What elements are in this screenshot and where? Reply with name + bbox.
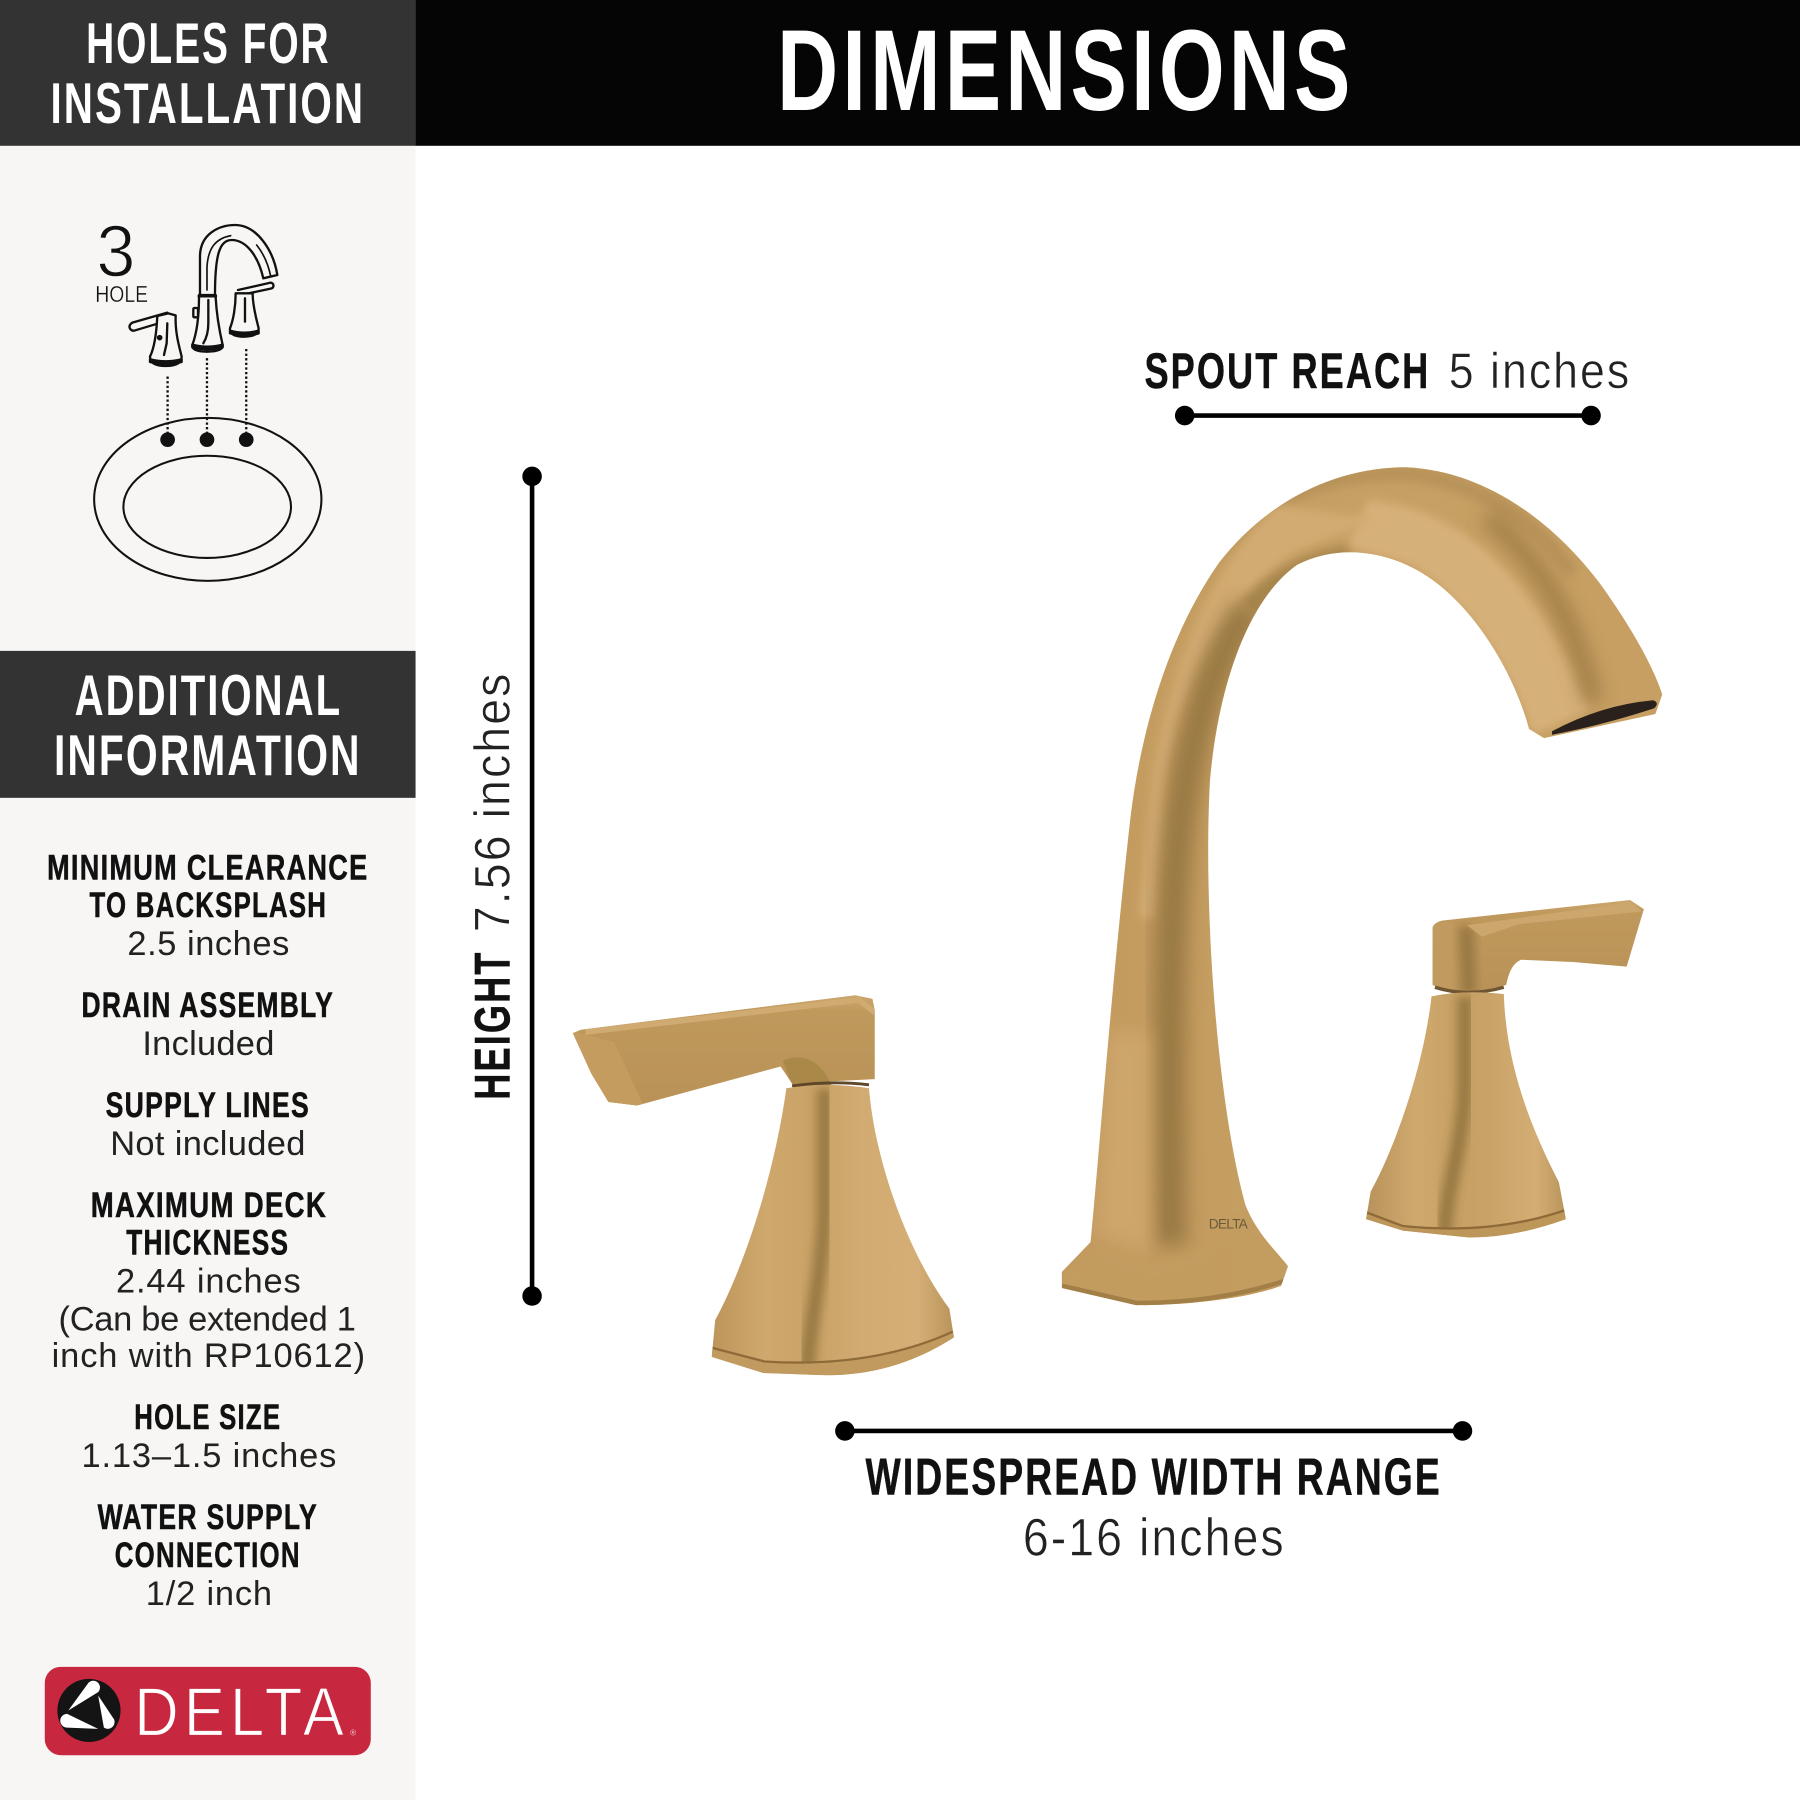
header: holes for installation: HOLES FOR: [86, 12, 331, 76]
icon: 3 hole faucet and sink: 3: [96, 210, 135, 293]
faucet: spout: DELTA: [1209, 1216, 1249, 1231]
height label: 7.56 inches: [464, 672, 521, 932]
spout reach dimension line: [1175, 406, 1601, 425]
header: holes for installation: INSTALLATION: [51, 72, 365, 136]
height dimension line: [522, 467, 542, 1306]
spec: maximum deck thickness: (Can be extended 1: [59, 1300, 356, 1338]
spec: minimum clearance: [47, 847, 368, 963]
spout reach label: 5 inches: [1449, 342, 1631, 399]
spec: drain assembly: [82, 985, 334, 1063]
spec: maximum deck thickness: THICKNESS: [126, 1223, 289, 1263]
spec: maximum deck thickness: inch with RP10612): [52, 1337, 365, 1375]
header: additional information: INFORMATION: [54, 724, 362, 788]
spec: maximum deck thickness: [52, 1185, 365, 1375]
spec: drain assembly: Included: [142, 1025, 274, 1063]
spec: water supply connection: 1/2 inch: [146, 1575, 272, 1613]
spec: minimum clearance: 2.5 inches: [127, 925, 289, 963]
spec: maximum deck thickness: MAXIMUM DECK: [91, 1185, 327, 1225]
spec: minimum clearance: TO BACKSPLASH: [90, 885, 327, 925]
spec: supply lines: Not included: [110, 1125, 305, 1163]
spec: water supply connection: WATER SUPPLY: [98, 1497, 318, 1537]
faucet: right handle: [1366, 900, 1644, 1246]
spec: supply lines: [106, 1085, 310, 1163]
spec: hole size: 1.13–1.5 inches: [82, 1437, 336, 1475]
left sidebar panel: [0, 0, 416, 1800]
header: additional information: [0, 651, 416, 798]
widespread width label: [866, 1448, 1442, 1567]
delta logo: [45, 1667, 371, 1755]
icon: 3 hole faucet and sink: HOLE: [95, 281, 148, 307]
spec: supply lines: SUPPLY LINES: [106, 1085, 310, 1125]
height label: [464, 672, 521, 1100]
spec: water supply connection: [98, 1497, 318, 1613]
icon: 3 hole faucet and sink: [94, 210, 321, 581]
widespread width label: 6-16 inches: [1023, 1508, 1286, 1567]
spec: maximum deck thickness: 2.44 inches: [116, 1263, 301, 1301]
height label: HEIGHT: [464, 951, 521, 1100]
title bar: dimensions: [416, 0, 1800, 146]
header: holes for installation: [0, 0, 416, 146]
spec: minimum clearance: MINIMUM CLEARANCE: [47, 847, 368, 887]
title bar: dimensions: DIMENSIONS: [777, 7, 1355, 135]
header: additional information: ADDITIONAL: [75, 664, 342, 728]
spout reach label: SPOUT REACH: [1145, 342, 1430, 399]
delta logo: ®: [350, 1729, 356, 1738]
widespread width dimension line: [835, 1421, 1472, 1441]
spec: drain assembly: DRAIN ASSEMBLY: [82, 985, 334, 1025]
spec: hole size: [82, 1397, 336, 1475]
widespread width label: WIDESPREAD WIDTH RANGE: [866, 1448, 1442, 1506]
faucet: left handle: [568, 995, 954, 1378]
spec: hole size: HOLE SIZE: [134, 1397, 281, 1437]
delta logo: DELTA: [134, 1674, 349, 1751]
faucet: spout: [1062, 467, 1662, 1309]
spec: water supply connection: CONNECTION: [115, 1535, 301, 1575]
